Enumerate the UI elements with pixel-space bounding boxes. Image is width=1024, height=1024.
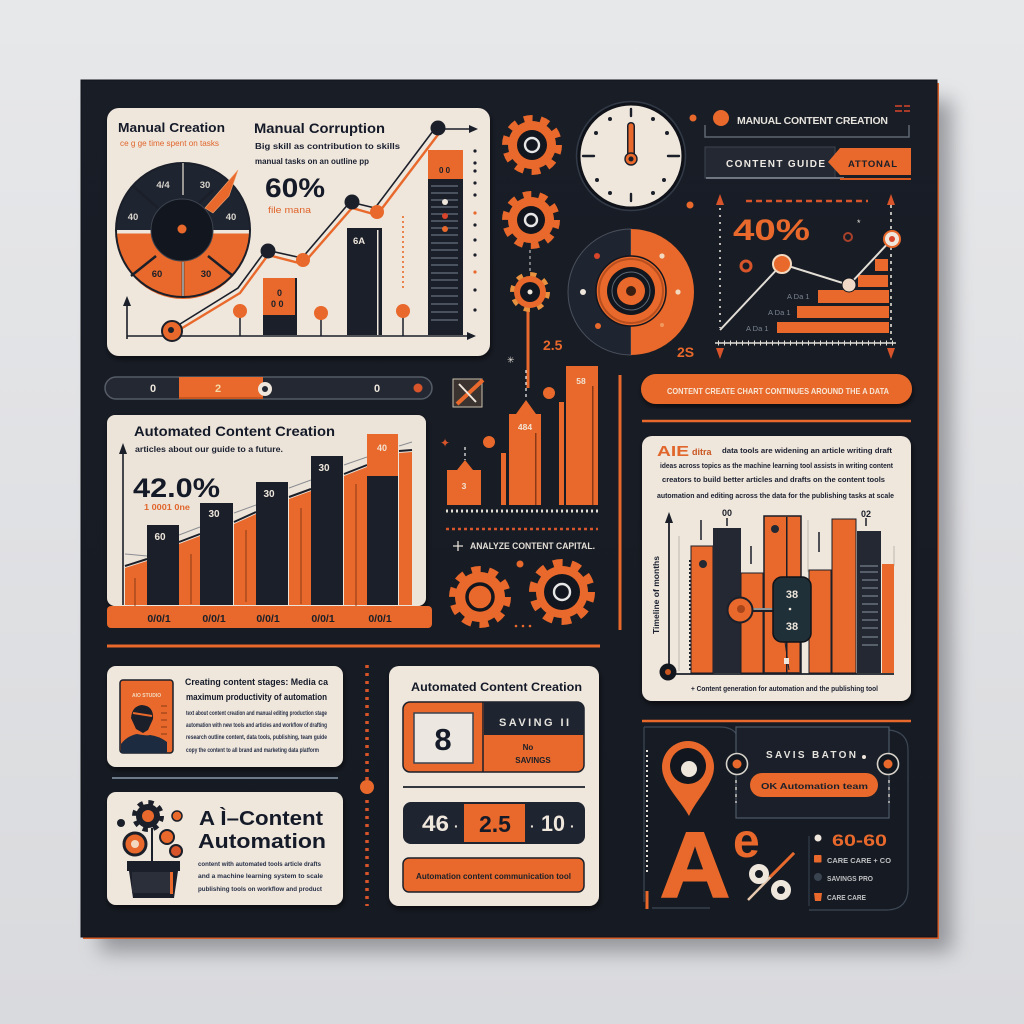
stat: 42.0% bbox=[133, 473, 220, 503]
icon: portrait: AIO STUDIO bbox=[132, 693, 161, 699]
panel: portrait card bbox=[107, 666, 343, 767]
panel: AI content automation bbox=[107, 792, 343, 905]
heading: manual creation: Manual Creation bbox=[118, 121, 225, 135]
label: 2.5: 2.5 bbox=[543, 337, 563, 353]
orange base strip: 0/0/1 bbox=[368, 613, 392, 625]
heading: manual corruption: Manual Corruption bbox=[254, 121, 385, 136]
panel: automated content creation bbox=[107, 415, 432, 628]
metric strip bbox=[403, 802, 585, 844]
panel: manual creation bbox=[107, 108, 490, 356]
legend: SAVINGS PRO bbox=[827, 874, 873, 883]
stat note: 1 0001 0ne bbox=[144, 503, 191, 512]
orange button bbox=[403, 858, 584, 892]
bar labels: A Da 1 bbox=[746, 324, 769, 333]
body text: copy the content to all brand and marketing data platform bbox=[186, 748, 319, 754]
bar labels: A Da 1 bbox=[768, 308, 791, 317]
title extra: ditra bbox=[692, 447, 712, 457]
savings box: SAVIS BATON bbox=[766, 750, 856, 761]
bar labels: A Da 1 bbox=[787, 292, 810, 301]
label: content guide with arrow tag: CONTENT GUIDE bbox=[726, 159, 825, 170]
chart: 40 percent bbox=[715, 194, 900, 359]
paragraph: ideas across topics as the machine learning tool assists in writing content bbox=[660, 461, 893, 470]
legend: CARE CARE bbox=[827, 893, 866, 902]
orange top bar: 40 bbox=[377, 443, 387, 453]
center bar chart: 58 bbox=[576, 376, 586, 386]
letter A: A bbox=[660, 813, 730, 917]
body text: text about content creation and manual editing production stage bbox=[186, 711, 328, 717]
slider: 0 bbox=[374, 383, 380, 395]
legend: CARE CARE + CO bbox=[827, 856, 891, 865]
area steps bbox=[125, 442, 412, 606]
bold text: maximum productivity of automation bbox=[186, 692, 327, 702]
trend markers bbox=[162, 120, 446, 341]
bold text bbox=[185, 677, 329, 702]
metric strip: 10 bbox=[541, 811, 565, 836]
pin markers bbox=[233, 304, 410, 336]
bar: tall dark: 0 0 bbox=[439, 166, 451, 175]
board bbox=[81, 80, 939, 939]
orange base strip: 0/0/1 bbox=[256, 613, 280, 625]
savings box: No bbox=[523, 743, 533, 752]
center bar chart: 3 bbox=[462, 481, 467, 491]
donut gauge chart: 4/4 bbox=[156, 180, 170, 191]
orange top bar bbox=[367, 434, 398, 476]
circle marker at origin bbox=[660, 664, 676, 680]
axis bbox=[119, 443, 127, 605]
stat caption: file mana bbox=[268, 205, 311, 215]
donut gauge chart: 30 bbox=[201, 269, 211, 280]
donut gauge chart bbox=[116, 163, 250, 299]
metric strip: 46 bbox=[422, 811, 449, 836]
orange base strip bbox=[107, 606, 432, 628]
donut dial bbox=[568, 229, 694, 355]
percent symbol bbox=[748, 853, 794, 900]
slider: 0 bbox=[150, 383, 156, 395]
title: Automation bbox=[198, 831, 326, 853]
line series bbox=[720, 239, 892, 330]
panel: savings button and legend bbox=[644, 727, 908, 917]
body text bbox=[198, 861, 323, 893]
savings box: SAVINGS bbox=[515, 756, 551, 765]
center bar chart: ✳ bbox=[507, 355, 515, 365]
body text: automation with new tools and articles and workflow of drafting bbox=[186, 723, 327, 729]
description text bbox=[255, 141, 400, 166]
header: manual content creation bbox=[705, 106, 910, 137]
description text: manual tasks on an outline pp bbox=[255, 156, 369, 166]
panel: automated savings bbox=[389, 666, 599, 906]
line markers: * bbox=[857, 218, 861, 228]
side dots bbox=[473, 149, 477, 312]
gear: lower with connector bbox=[513, 250, 547, 388]
bar labels: 60 bbox=[154, 532, 166, 543]
paragraph: automation and editing across the data for the publishing tasks at scale bbox=[657, 491, 894, 500]
icon: gear flower in pot bbox=[117, 803, 182, 898]
icon: crossed pencil bbox=[453, 379, 483, 407]
title bbox=[198, 807, 326, 853]
bar chart: 02 bbox=[861, 509, 871, 519]
subheading: articles about our guide to a future. bbox=[135, 445, 283, 454]
bar: medium dark bbox=[347, 228, 382, 335]
slider: 2 bbox=[215, 383, 221, 395]
icon: portrait bbox=[120, 680, 173, 753]
center bar chart: ✦ bbox=[440, 436, 450, 450]
savings box bbox=[403, 702, 584, 772]
bar chart bbox=[665, 508, 894, 674]
knob with device readout bbox=[728, 577, 811, 672]
center bar chart: 484 bbox=[518, 422, 532, 432]
rotated axis label: Timeline of months bbox=[652, 555, 661, 634]
body text: publishing tools on workflow and product bbox=[198, 886, 323, 893]
bar labels bbox=[154, 463, 330, 543]
subheading: small orange note: ce g ge time spent on tasks bbox=[120, 138, 219, 148]
metric strip: · bbox=[454, 818, 459, 834]
bar labels: 30 bbox=[208, 509, 220, 520]
metric strip: 2.5 bbox=[479, 811, 511, 837]
metric strip: · bbox=[570, 818, 575, 834]
donut gauge chart: 60 bbox=[152, 269, 162, 280]
bar chart: 00 bbox=[722, 508, 732, 518]
legend: 60-60 bbox=[832, 832, 887, 850]
savings box bbox=[726, 727, 898, 818]
pill banner: CONTENT CREATE CHART CONTINUES AROUND THE A DATA bbox=[667, 386, 889, 396]
bar labels: 30 bbox=[318, 463, 330, 474]
bar labels: 30 bbox=[263, 489, 275, 500]
orange base strip: 0/0/1 bbox=[147, 613, 171, 625]
dark bars bbox=[147, 456, 398, 605]
line markers bbox=[741, 218, 900, 292]
bar: short orange: 0 0 bbox=[271, 299, 284, 309]
title: A Ì–Content bbox=[199, 807, 323, 830]
donut gauge chart: 40 bbox=[226, 212, 236, 223]
paragraph: creators to build better articles and drafts on the content tools bbox=[662, 475, 885, 484]
gear: bottom right bbox=[533, 563, 591, 621]
horizontal bars bbox=[777, 259, 889, 333]
footer text: + Content generation for automation and the publishing tool bbox=[691, 684, 878, 693]
knob with device readout: 38 bbox=[786, 589, 798, 601]
label: content guide with arrow tag bbox=[705, 147, 911, 179]
label: 25: 2S bbox=[677, 344, 694, 360]
letter e: e bbox=[733, 815, 760, 868]
line chart with axes bbox=[123, 120, 478, 341]
icon: location pin bbox=[662, 741, 714, 816]
stat: 40 percent: 40% bbox=[733, 214, 810, 247]
orange base strip: 0/0/1 bbox=[311, 613, 335, 625]
gear: bottom left bbox=[453, 570, 507, 624]
title: AIE bbox=[657, 443, 689, 460]
slider bbox=[105, 377, 432, 399]
stat: 60 percent: 60% bbox=[265, 173, 325, 203]
metric strip: · bbox=[530, 818, 535, 834]
label: content guide with arrow tag: ATTONAL bbox=[848, 159, 897, 170]
bar labels bbox=[746, 292, 810, 333]
gear: middle bbox=[506, 195, 556, 245]
bar: medium dark: 6A bbox=[353, 236, 365, 247]
orange dots near clock bbox=[686, 114, 696, 208]
donut gauge chart: 40 bbox=[128, 212, 138, 223]
description text: Big skill as contribution to skills bbox=[255, 141, 400, 151]
savings box: OK Automation team bbox=[761, 781, 869, 791]
orange button: Automation content communication tool bbox=[416, 872, 571, 881]
legend bbox=[809, 832, 891, 906]
small orange dots bbox=[515, 560, 531, 627]
bar: short orange: 0 bbox=[277, 288, 282, 298]
body text bbox=[186, 711, 328, 754]
heading: Automated Content Creation bbox=[411, 682, 582, 694]
gear: top bbox=[506, 119, 558, 171]
clock bbox=[576, 102, 686, 210]
body text: research outline content, data tools, publishing, team guide bbox=[186, 735, 328, 741]
panel: AI data bbox=[642, 436, 911, 701]
body text: content with automated tools article drafts bbox=[198, 861, 321, 868]
center bar chart bbox=[440, 355, 598, 529]
donut gauge chart: 30 bbox=[200, 180, 210, 191]
paragraph bbox=[657, 446, 894, 500]
savings box: SAVING II bbox=[499, 717, 569, 729]
heading: Automated Content Creation bbox=[134, 424, 335, 439]
caption: ANALYZE CONTENT CAPITAL. bbox=[470, 541, 595, 551]
body text: and a machine learning system to scale bbox=[198, 873, 323, 880]
header: manual content creation: MANUAL CONTENT CREATION bbox=[737, 115, 888, 127]
dashed vertical divider with dot bbox=[360, 665, 374, 906]
bar: tall dark bbox=[428, 150, 463, 335]
orange base strip: 0/0/1 bbox=[202, 613, 226, 625]
pill banner bbox=[641, 374, 912, 404]
savings box: 8 bbox=[434, 722, 452, 757]
paragraph: data tools are widening an article writing draft bbox=[722, 446, 893, 455]
bar: short orange bbox=[263, 278, 297, 335]
knob with device readout: 38 bbox=[786, 621, 798, 633]
bold text: Creating content stages: Media ca bbox=[185, 677, 329, 687]
trend line bbox=[172, 127, 440, 333]
